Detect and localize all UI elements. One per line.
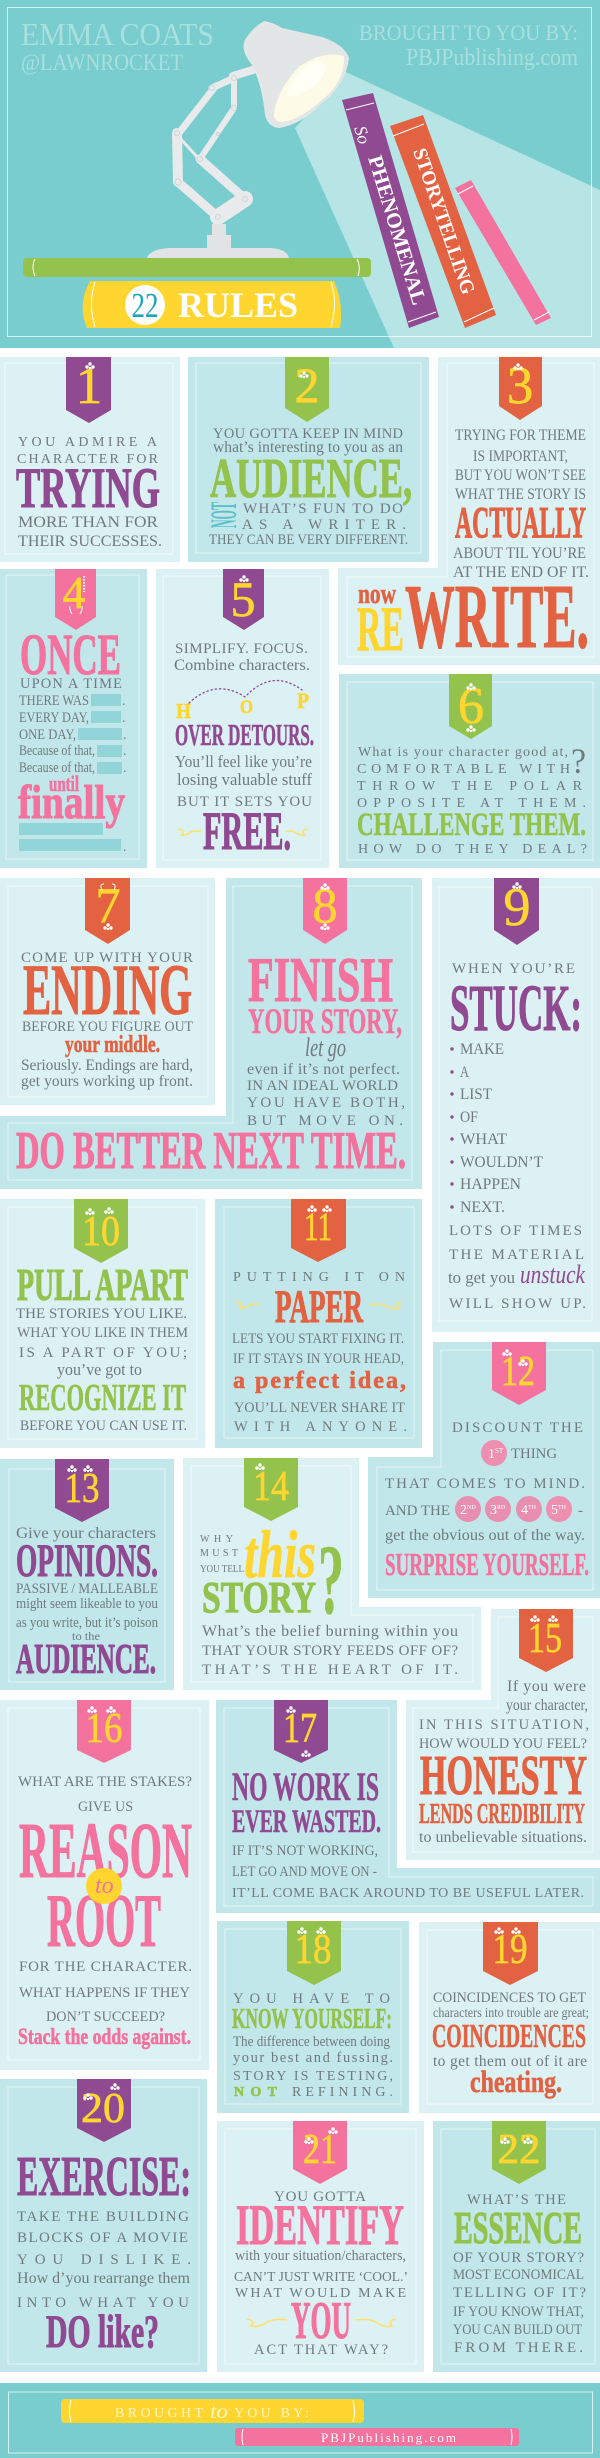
badge: 3rd: RD: [497, 1505, 506, 1511]
panel: rule 7: [0, 877, 215, 1105]
panel: rule 4: [0, 567, 147, 868]
checklist: WOULDN’T: [460, 1154, 543, 1171]
text: rule 18: YOU HAVE TO: [233, 1991, 390, 2007]
text: rule 17: EVER WASTED.: [232, 1804, 381, 1840]
book: green: [23, 258, 371, 277]
text: rule 16: WHAT ARE THE STAKES?: [18, 1774, 192, 1790]
text: rule 18: KNOW YOURSELF:: [232, 2003, 392, 2035]
text: rule 18: NOT: [234, 2085, 278, 2100]
text: rule 4: .: [122, 694, 126, 709]
text: rule 1: TRYING: [16, 457, 160, 520]
checklist: MAKE: [460, 1041, 504, 1058]
text: rule 8: IN AN IDEAL WORLD: [247, 1078, 398, 1094]
text: rule 2: THEY CAN BE VERY DIFFERENT.: [209, 532, 408, 548]
text: rule 13: might seem likeable to you: [16, 1596, 158, 1612]
text: rule 4: Because of that,: [19, 760, 95, 776]
badge: to: to: [95, 1873, 114, 1899]
ribbon: 6: 6: [458, 678, 484, 735]
text: rule 9: LOTS OF TIMES: [449, 1223, 582, 1239]
ribbon: 9: 9: [504, 877, 530, 937]
text: rule 22: MOST ECONOMICAL: [453, 2267, 584, 2283]
icon: hop arcs: H: [176, 699, 191, 723]
header credit: BROUGHT TO YOU BY:: [359, 20, 578, 45]
text: rule 9: THE MATERIAL: [449, 1247, 584, 1263]
text: rule 1: THEIR SUCCESSES.: [18, 533, 162, 550]
text: rule 9: WILL SHOW UP.: [449, 1296, 586, 1312]
text: rule 3: now: [358, 579, 397, 610]
text: rule 18: [232, 1991, 393, 2100]
text: rule 17: IT’LL COME BACK AROUND TO BE USEFUL LATER.: [232, 1886, 584, 1901]
badge: 1st: [481, 1440, 507, 1466]
book: pink credit: PBJPublishing.com: [321, 2430, 456, 2445]
checklist: HAPPEN: [460, 1176, 521, 1193]
text: rule 6: OPPOSITE AT THEM.: [357, 796, 586, 811]
text: rule 16: FOR THE CHARACTER.: [19, 1959, 192, 1975]
ribbon: 6: [449, 674, 492, 739]
ribbon: 14: [244, 1458, 298, 1521]
ribbon: 8: [303, 877, 347, 944]
badge: 5th: [546, 1496, 572, 1522]
text: rule 11: LETS YOU START FIXING IT.: [232, 1331, 404, 1347]
text: rule 10: IS A PART OF YOU;: [19, 1345, 187, 1361]
text: rule 12: get the obvious out of the way.: [385, 1527, 585, 1544]
text: rule 11: YOU’LL NEVER SHARE IT: [234, 1400, 405, 1416]
ribbon: 5: 5: [230, 571, 256, 627]
text: rule 20: EXERCISE:: [17, 2146, 191, 2208]
ribbon: 1: 1: [76, 357, 102, 415]
ribbon: 21: 21: [303, 2127, 337, 2173]
text: rule 4: .: [123, 840, 126, 855]
text: rule 3: RE: [357, 593, 404, 664]
text: rule 2: AS A WRITER.: [242, 517, 406, 533]
panel: rule 1: [0, 357, 180, 562]
text: rule 8: YOU HAVE BOTH,: [247, 1095, 405, 1111]
text: rule 22: WHAT’S THE: [467, 2192, 566, 2208]
text: rule 16: GIVE US: [78, 1799, 133, 1815]
text: rule 16: REASON: [19, 1808, 192, 1895]
ribbon: 11: [291, 1199, 346, 1262]
ribbon: 17: 17: [283, 1706, 317, 1752]
badge: 1st: 1: [488, 1447, 495, 1462]
checklist: A: [460, 1064, 469, 1081]
book: orange storytelling: [390, 115, 496, 328]
ribbon: 15: [519, 1609, 573, 1672]
panel: rule 12: [368, 1342, 600, 1598]
panel: rule 6: [339, 674, 600, 868]
text: rule 10: WHAT YOU LIKE IN THEM: [17, 1325, 188, 1341]
book: purple phenomenal: PHENOMENAL: [363, 152, 431, 308]
ribbon: 20: 20: [81, 2086, 125, 2132]
text: rule 18: The difference between doing: [233, 2034, 390, 2050]
text: rule 13: AUDIENCE.: [16, 1637, 156, 1683]
icon: hop arcs: [176, 681, 309, 723]
badge: 3rd: 3: [490, 1503, 497, 1518]
text: rule 21: [234, 2189, 408, 2358]
text: rule 14: YOU TELL: [200, 1564, 244, 1575]
text: rule 12: [385, 1420, 589, 1582]
text: rule 15: your character,: [506, 1697, 588, 1714]
text: rule 15: [419, 1678, 589, 1846]
text: rule 22: FROM THERE.: [454, 2340, 583, 2356]
panel: rule 2: [188, 357, 429, 562]
text: rule 4: until: [49, 771, 79, 796]
text: rule 12: DISCOUNT THE: [452, 1420, 583, 1436]
text: rule 17: [232, 1764, 584, 1901]
light beam: [295, 72, 600, 348]
icon: hop arcs: O: [240, 697, 253, 718]
text: rule 4: ONCE: [20, 622, 121, 687]
text: rule 20: YOU DISLIKE.: [17, 2252, 191, 2268]
text: rule 3: WHAT THE STORY IS: [455, 486, 586, 503]
text: rule 17: IF IT’S NOT WORKING,: [232, 1843, 378, 1859]
text: rule 6: HOW DO THEY DEAL?: [358, 842, 587, 857]
text: rule 20: [17, 2146, 191, 2358]
text: rule 22: OF YOUR STORY?: [453, 2250, 584, 2266]
text: rule 4: .: [123, 744, 126, 759]
text: rule 6: [357, 741, 587, 857]
ribbon: 4: 4: [62, 567, 86, 618]
text: rule 21: YOU: [291, 2292, 351, 2350]
text: rule 3: IS IMPORTANT,: [473, 448, 568, 465]
icon: swirls: [247, 2319, 396, 2326]
panel: rule 13: [0, 1459, 174, 1690]
text: rule 4: UPON A TIME: [20, 676, 122, 692]
text: rule 1: YOU ADMIRE A: [18, 435, 158, 450]
text: rule 14: STORY: [202, 1573, 316, 1622]
book: yellow credit: [61, 2399, 364, 2423]
text: rule 11: WITH ANYONE.: [234, 1419, 407, 1435]
text: rule 12: AND THE: [385, 1503, 450, 1519]
text: rule 11: IF IT STAYS IN YOUR HEAD,: [233, 1351, 404, 1367]
panel: rule 5: [156, 569, 329, 868]
text: rule 5: losing valuable stuff: [177, 770, 312, 789]
text: rule 14: ?: [318, 1524, 344, 1635]
text: rule 4: finally: [18, 776, 125, 829]
text: rule 6: What is your character good at,: [358, 745, 568, 760]
text: rule 6: COMFORTABLE WITH: [357, 762, 570, 777]
text: rule 20: DO like?: [46, 2306, 159, 2358]
panel: rule 15: [406, 1609, 600, 1860]
text: rule 6: THROW THE POLAR: [357, 779, 583, 794]
panel: rule 19: [419, 1922, 600, 2113]
checklist: NEXT.: [460, 1199, 505, 1216]
text: rule 18: REFINING.: [292, 2085, 393, 2100]
panel: rule 20: [0, 2079, 207, 2372]
ribbon: 16: [77, 1700, 131, 1763]
badge: 5th: TH: [558, 1505, 567, 1511]
text: rule 5: [174, 641, 314, 861]
header credit: [359, 20, 578, 71]
text: rule 14: What’s the belief burning within you: [202, 1623, 458, 1640]
panel: rule 14: [183, 1458, 481, 1690]
text: rule 15: HOW WOULD YOU FEEL?: [419, 1736, 587, 1752]
text: rule 7: get yours working up front.: [21, 1073, 193, 1090]
book: purple phenomenal: So: [350, 123, 375, 146]
panel: rule 9: [432, 877, 600, 1332]
ribbon: 1: [66, 357, 111, 423]
book: yellow credit: YOU BY:: [234, 2406, 309, 2421]
text: rule 14: THAT YOUR STORY FEEDS OFF OF?: [202, 1643, 458, 1659]
ribbon: 2: 2: [294, 357, 320, 413]
badge: 3rd: [485, 1496, 511, 1522]
text: rule 15: to unbelievable situations.: [419, 1829, 587, 1846]
panel: rule 8: [0, 877, 422, 1189]
text: rule 10: RECOGNIZE IT: [19, 1377, 186, 1419]
text: rule 16: [18, 1774, 192, 2049]
text: rule 2: YOU GOTTA KEEP IN MIND: [213, 426, 403, 442]
text: rule 22: IF YOU KNOW THAT,: [453, 2304, 584, 2320]
text: rule 22: [453, 2192, 586, 2356]
badge: 4th: TH: [528, 1505, 537, 1511]
text: rule 10: THE STORIES YOU LIKE.: [16, 1306, 187, 1322]
text: rule 20: TAKE THE BUILDING: [17, 2209, 189, 2225]
text: rule 21: WHAT WOULD MAKE: [235, 2286, 406, 2301]
badge: 5th: 5: [551, 1503, 558, 1518]
icon: swirls: [236, 1302, 402, 1309]
text: rule 10: PULL APART: [17, 1260, 188, 1310]
ribbon: 3: [499, 357, 542, 420]
book: yellow 22 rules: RULES: [178, 285, 298, 325]
text: rule 14: THAT’S THE HEART OF IT.: [202, 1662, 458, 1678]
badge: 2nd: [455, 1496, 481, 1522]
text: rule 22: TELLING OF IT?: [453, 2285, 586, 2301]
text: rule 2: what’s interesting to you as an: [213, 439, 403, 456]
text: rule 6: ?: [571, 741, 586, 781]
text: rule 5: You’ll feel like you’re: [175, 752, 312, 771]
ribbon: 18: [287, 1921, 341, 1985]
text: rule 3: ABOUT TIL YOU’RE: [453, 545, 586, 562]
text: rule 5: SIMPLIFY. FOCUS.: [175, 641, 308, 657]
text: rule 16: ROOT: [47, 1880, 161, 1963]
text: rule 4: .: [122, 711, 126, 726]
text: rule 1: MORE THAN FOR: [18, 514, 158, 531]
text: rule 19: to get them out of it are: [433, 2053, 587, 2070]
ribbon: 20: [77, 2079, 131, 2142]
text: rule 4: THERE WAS: [19, 693, 89, 709]
text: rule 4: [18, 622, 126, 855]
ribbon: 12: [492, 1342, 546, 1405]
panel: rule 17: [216, 1700, 600, 1913]
text: rule 13: to the: [72, 1629, 100, 1643]
ribbon: 5: [223, 569, 264, 630]
text: rule 7: ENDING: [23, 950, 192, 1030]
ribbon: 13: [55, 1459, 109, 1522]
header title: Emma Coats: EMMA COATS: [21, 16, 214, 52]
text: rule 19: [432, 1990, 589, 2099]
text: rule 21: YOU GOTTA: [274, 2189, 366, 2205]
text: rule 7: [21, 950, 193, 1090]
text: rule 17: NO WORK IS: [232, 1764, 379, 1809]
panel: rule 11: [215, 1199, 422, 1448]
book: yellow credit: BROUGHT: [115, 2406, 203, 2421]
text: rule 2: WHAT’S FUN TO DO: [243, 501, 403, 517]
book: purple phenomenal: [342, 93, 439, 328]
text: rule 7: COME UP WITH YOUR: [21, 950, 193, 966]
text: rule 18: STORY IS TESTING,: [233, 2069, 393, 2084]
book: orange storytelling: STORYTELLING: [408, 145, 479, 298]
ribbon: 14: 14: [253, 1464, 289, 1510]
text: rule 16: Stack the odds against.: [18, 2024, 191, 2049]
checklist: [450, 1041, 543, 1216]
checklist: LIST: [460, 1086, 492, 1103]
badge: 4th: 4: [521, 1503, 528, 1518]
ribbon: 7: 7: [96, 877, 120, 933]
text: rule 4: EVERY DAY,: [19, 710, 89, 726]
text: rule 10: you’ve got to: [57, 1360, 142, 1379]
ribbon: 10: 10: [82, 1209, 120, 1255]
text: rule 11: PUTTING IT ON: [233, 1270, 405, 1285]
text: rule 13: as you write, but it’s poison: [16, 1615, 159, 1631]
text: rule 4: .: [123, 728, 126, 743]
text: rule 13: Give your characters: [16, 1525, 156, 1542]
panel: rule 18: [217, 1921, 409, 2113]
ribbon: 2: [285, 357, 329, 422]
badge: to: [86, 1868, 122, 1904]
text: rule 18: your best and fussing.: [233, 2050, 393, 2066]
text: rule 5: OVER DETOURS.: [175, 717, 314, 752]
text: rule 14: MUST: [200, 1548, 238, 1559]
checklist: OF: [460, 1109, 478, 1126]
text: rule 3: AT THE END OF IT.: [453, 564, 589, 581]
ribbon: 9: [494, 877, 539, 945]
ribbon: 11: 11: [304, 1204, 332, 1249]
text: rule 5: Combine characters.: [174, 657, 310, 674]
text: rule 12: -: [578, 1503, 583, 1519]
text: rule 9: to get you: [448, 1268, 515, 1287]
ribbon: 19: 19: [492, 1927, 528, 1973]
text: rule 8: BUT MOVE ON.: [247, 1113, 403, 1129]
text: rule 15: If you were: [507, 1678, 586, 1695]
ribbon: 10: [74, 1199, 128, 1263]
text: rule 21: with your situation/characters,: [235, 2248, 406, 2264]
text: rule 9: [448, 961, 586, 1312]
ribbon: 19: [483, 1922, 538, 1985]
text: rule 20: How d’you rearrange them: [17, 2270, 190, 2287]
badge: 1st: ST: [495, 1447, 504, 1455]
panel: rule 3: [338, 357, 600, 667]
text: rule 13: PASSIVE / MALLEABLE: [16, 1581, 158, 1597]
text: rule 7: BEFORE YOU FIGURE OUT: [22, 1019, 193, 1035]
footer panel: [0, 2383, 600, 2458]
text: rule 20: BLOCKS OF A MOVIE: [17, 2230, 188, 2246]
text: rule 5: FREE.: [203, 801, 291, 861]
text: rule 3: [357, 427, 589, 667]
ribbon: 16: 16: [86, 1706, 122, 1752]
text: rule 16: DON’T SUCCEED?: [46, 2009, 165, 2025]
text: rule 9: WHEN YOU’RE: [452, 961, 575, 977]
text: rule 2: AUDIENCE,: [210, 448, 412, 510]
text: rule 8: YOUR STORY,: [248, 1001, 402, 1041]
header credit: PBJPublishing.com: [406, 45, 578, 71]
text: rule 19: cheating.: [470, 2064, 562, 2099]
book: yellow 22 rules: 22: [132, 286, 158, 325]
text: rule 4: ONE DAY,: [19, 727, 76, 743]
header title: Emma Coats: [21, 16, 214, 75]
text: rule 1: CHARACTER FOR: [17, 452, 159, 467]
ribbon: 13: 13: [64, 1466, 100, 1512]
text: rule 7: your middle.: [65, 1032, 160, 1058]
text: rule 11: a perfect idea,: [233, 1368, 406, 1394]
text: rule 4: .: [123, 761, 126, 776]
text: rule 14: [200, 1516, 458, 1678]
text: rule 5: BUT IT SETS YOU: [177, 794, 312, 810]
badge: 2nd: 2: [460, 1503, 467, 1518]
icon: desk lamp: [147, 21, 349, 258]
ribbon: 7: [85, 877, 130, 944]
ribbon: 4: [55, 567, 96, 630]
panel: rule 22: [433, 2121, 600, 2372]
text: rule 8: even if it’s not perfect.: [247, 1061, 400, 1078]
book: pink credit: [235, 2428, 519, 2446]
panel: rule 21: [217, 2121, 424, 2372]
text: rule 17: LET GO AND MOVE ON -: [232, 1864, 377, 1880]
book: pink: [455, 180, 551, 325]
text: rule 10: BEFORE YOU CAN USE IT.: [20, 1418, 187, 1434]
ribbon: 22: 22: [498, 2127, 540, 2173]
header panel: [0, 0, 600, 348]
text: rule 11: [232, 1270, 407, 1435]
badge: 2nd: ND: [467, 1505, 476, 1511]
ribbon: 8: 8: [312, 877, 338, 933]
text: rule 8: let go: [305, 1033, 346, 1062]
text: rule 21: CAN’T JUST WRITE ‘COOL.’: [234, 2270, 408, 2285]
icon: swirls: [178, 829, 308, 835]
text: rule 2: [204, 426, 412, 548]
text: rule 14: this: [244, 1516, 316, 1592]
checklist: WHAT: [460, 1131, 507, 1148]
text: rule 9: unstuck: [520, 1260, 585, 1289]
text: rule 20: INTO WHAT YOU: [17, 2295, 189, 2311]
text: rule 8: [16, 945, 406, 1180]
icon: hop arcs: P: [297, 688, 309, 713]
ribbon: 21: [293, 2121, 347, 2184]
text: rule 12: THING: [511, 1446, 557, 1462]
header title: Emma Coats: @LAWNROCKET: [21, 50, 183, 75]
text: rule 12: THAT COMES TO MIND.: [385, 1476, 585, 1492]
text: rule 8: FINISH: [248, 945, 393, 1015]
text: rule 15: IN THIS SITUATION,: [419, 1717, 589, 1733]
text: rule 13: [16, 1525, 159, 1683]
text: rule 11: PAPER: [275, 1281, 364, 1333]
ribbon: 15: 15: [528, 1616, 562, 1662]
text: rule 1: [16, 435, 162, 550]
ribbon: 18: 18: [294, 1927, 332, 1973]
ribbon: 22: [492, 2121, 546, 2184]
text: rule 14: WHY: [200, 1534, 233, 1545]
text: rule 10: [16, 1260, 188, 1434]
text: rule 3: TRYING FOR THEME: [455, 427, 586, 444]
text: rule 13: OPINIONS.: [16, 1535, 158, 1587]
ribbon: 3: 3: [507, 357, 533, 415]
text: rule 4: Because of that,: [19, 743, 95, 759]
panel: rule 10: [0, 1199, 205, 1448]
text: rule 19: COINCIDENCES TO GET: [433, 1990, 586, 2006]
text: rule 7: Seriously. Endings are hard,: [21, 1057, 193, 1074]
ribbon: 12: 12: [501, 1349, 535, 1395]
ribbon: 17: [274, 1700, 328, 1763]
book: yellow 22 rules: [83, 281, 341, 328]
panel: rule 16: [0, 1700, 209, 2070]
text: rule 21: ACT THAT WAY?: [254, 2342, 388, 2358]
book: yellow credit: to: [210, 2401, 228, 2423]
text: rule 2: NOT: [204, 502, 245, 528]
text: rule 21: IDENTIFY: [236, 2194, 404, 2257]
text: rule 16: WHAT HAPPENS IF THEY: [19, 1985, 190, 2001]
badge: 4th: [516, 1496, 542, 1522]
